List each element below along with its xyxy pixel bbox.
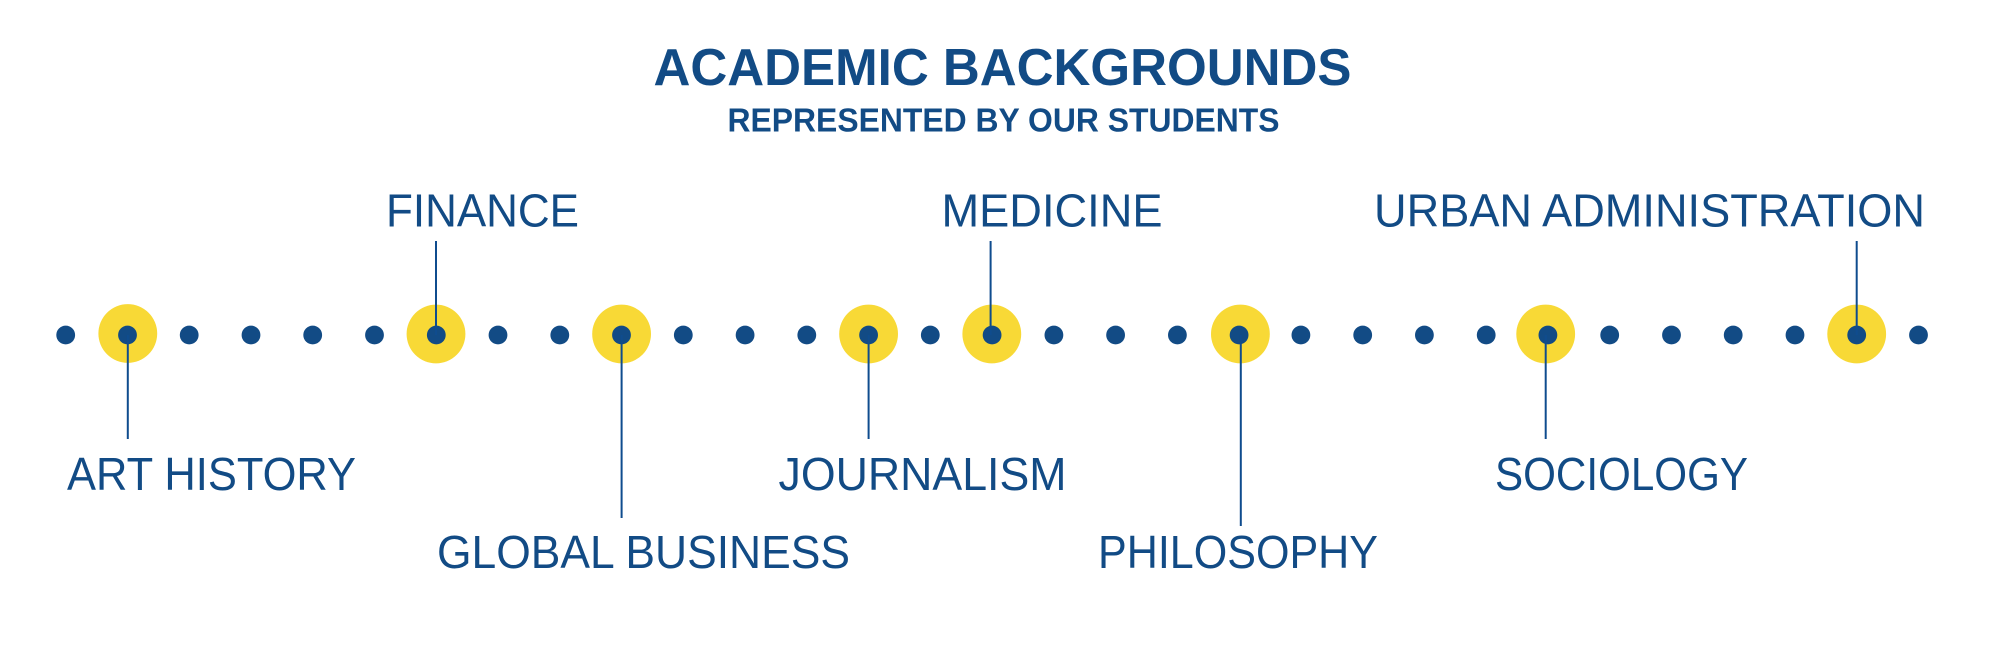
timeline: dots (56, 326, 1928, 344)
label: urban administration: URBAN ADMINISTRATION (1374, 185, 1925, 237)
label: finance: FINANCE (386, 185, 579, 237)
label: sociology: SOCIOLOGY (1495, 448, 1748, 500)
label: journalism: JOURNALISM (778, 448, 1066, 500)
title: ACADEMIC BACKGROUNDS (654, 39, 1352, 97)
subtitle: REPRESENTED BY OUR STUDENTS (728, 102, 1280, 138)
label: art history: ART HISTORY (67, 448, 356, 500)
timeline: yellow highlights (98, 304, 1886, 363)
label: global business: GLOBAL BUSINESS (437, 526, 850, 578)
label: philosophy: PHILOSOPHY (1098, 526, 1378, 578)
label: medicine: MEDICINE (942, 185, 1162, 237)
